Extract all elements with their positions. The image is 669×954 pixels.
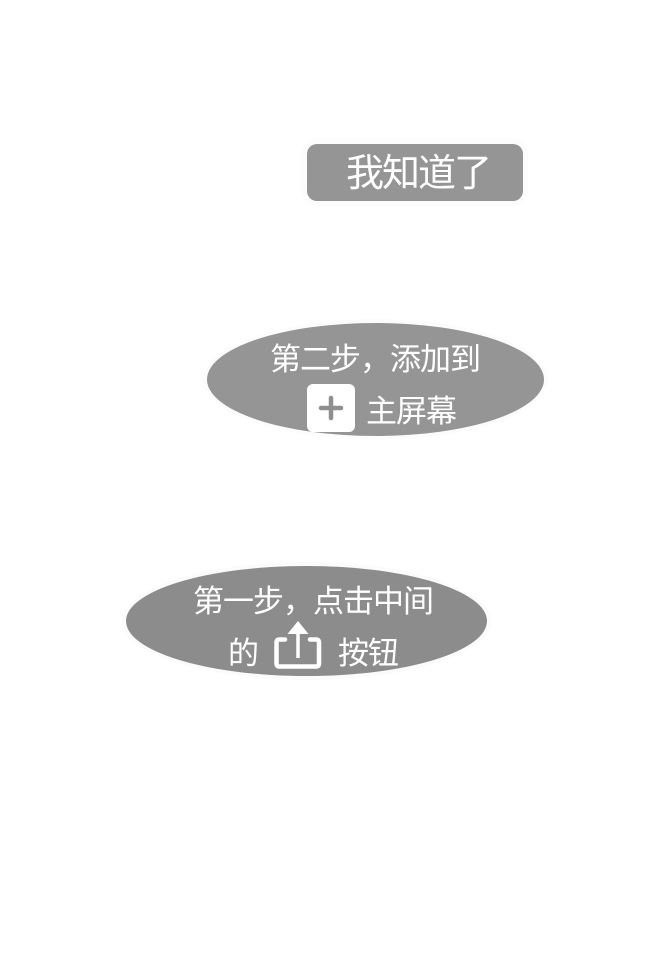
icon: add to home screen bbox=[307, 384, 355, 432]
step two ellipse bbox=[207, 323, 544, 436]
step two second line: 主屏幕 bbox=[366, 394, 456, 429]
step one ellipse bbox=[126, 566, 487, 676]
step one word after icon: 按钮 bbox=[338, 636, 398, 671]
icon: share bbox=[274, 621, 322, 669]
button: got it bbox=[307, 144, 523, 201]
panel: step two bbox=[207, 323, 544, 436]
panel: step one bbox=[126, 566, 487, 676]
step one first line: 第一步，点击中间 bbox=[193, 584, 433, 619]
step two first line: 第二步，添加到 bbox=[270, 342, 480, 377]
button label: 我知道了 bbox=[346, 153, 490, 195]
step one word before icon: 的 bbox=[228, 636, 258, 671]
